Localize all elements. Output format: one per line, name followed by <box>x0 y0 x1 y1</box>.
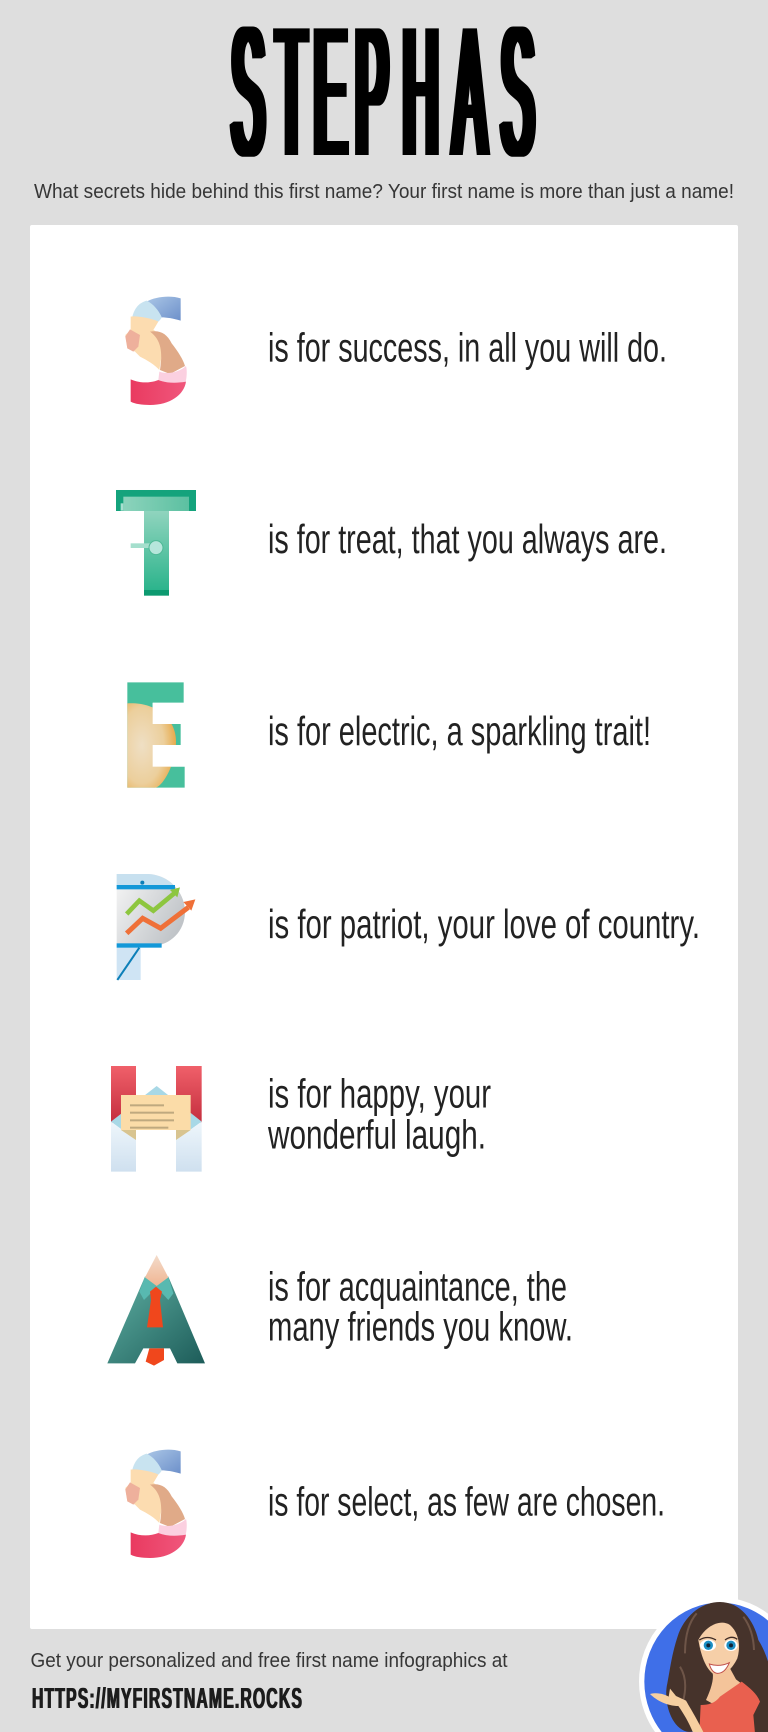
icon: letter P chart board <box>117 874 195 980</box>
text: happy <box>267 1070 491 1158</box>
row: S for select <box>125 1450 665 1558</box>
row: E for electric <box>127 682 651 788</box>
text: happy: is for happy, your <box>268 1070 491 1116</box>
row: T for treat <box>116 490 667 596</box>
footer text: Get your personalized and free first name infographics at <box>30 1650 508 1672</box>
row: P for patriot <box>117 874 700 980</box>
panel: letter rows <box>30 225 738 1629</box>
icon: letter A suit and tie <box>107 1255 205 1366</box>
icon: letter T door <box>116 490 196 596</box>
avatar: cartoon woman in blue circle <box>642 1600 768 1732</box>
text: happy: wonderful laugh. <box>267 1112 486 1158</box>
subtitle: What secrets hide behind this first name? Your first name is more than just a name! <box>34 180 734 203</box>
row: S for success <box>125 297 667 405</box>
row: H for happy <box>111 1066 491 1173</box>
text: acquaintance <box>268 1264 573 1350</box>
text: acquaintance: many friends you know. <box>268 1304 573 1350</box>
row: A for acquaintance <box>107 1255 573 1366</box>
icon: letter S with handshake <box>125 297 187 405</box>
footer url: HTTPS://MYFIRSTNAME.ROCKS <box>32 1683 303 1715</box>
icon: letter S with handshake <box>125 1450 187 1558</box>
icon: letter H envelope <box>111 1066 202 1173</box>
icon: letter E moon <box>127 682 189 788</box>
text: acquaintance: is for acquaintance, the <box>268 1264 567 1310</box>
